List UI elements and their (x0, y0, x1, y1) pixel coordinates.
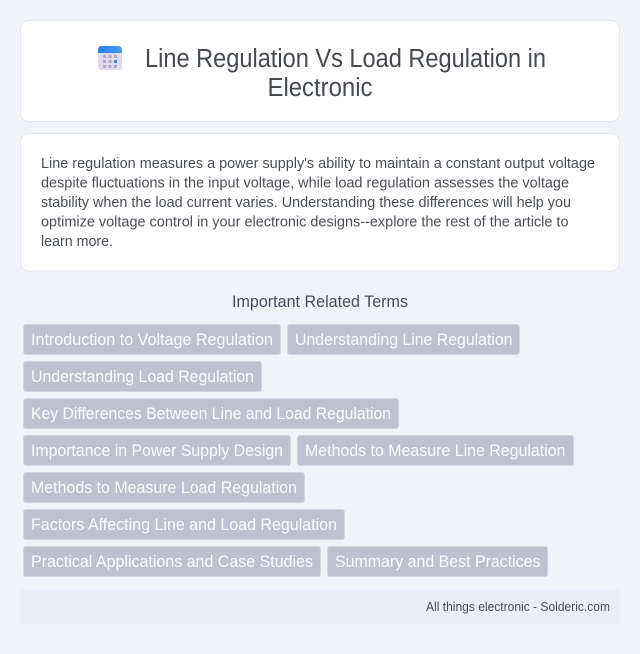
text block: introduction: stability when the load current varies. Understanding these differences will help you (41, 195, 571, 211)
panel: introduction card (20, 134, 620, 271)
text block: introduction: optimize voltage control in your electronic designs--explore the rest of the article to (41, 214, 568, 230)
tag: methods to measure line regulation (298, 436, 574, 466)
title (145, 45, 546, 102)
text block: introduction: Line regulation measures a power supply's ability to maintain a constant output voltage (41, 156, 595, 172)
tag: understanding line regulation: Understanding Line Regulation (295, 330, 512, 349)
tag: methods to measure line regulation: Methods to Measure Line Regulation (305, 441, 566, 460)
tag: practical applications (24, 546, 320, 576)
tag: methods to measure load regulation: Methods to Measure Load Regulation (31, 478, 297, 497)
tag: practical applications: Practical Applications and Case Studies (31, 552, 313, 571)
tag: factors affecting (24, 510, 344, 540)
tag: summary and best practices: Summary and Best Practices (335, 552, 540, 571)
tag: key differences (24, 398, 398, 428)
tag: understanding load regulation: Understanding Load Regulation (31, 367, 254, 386)
title: Electronic (268, 74, 373, 102)
tag: summary and best practices (328, 546, 548, 576)
tag: understanding load regulation (24, 362, 262, 392)
icon: calendar (98, 46, 122, 70)
footer: All things electronic - Solderic.com (426, 600, 610, 614)
title: Line Regulation Vs Load Regulation in (145, 45, 546, 73)
tag: introduction to voltage regulation (24, 324, 280, 354)
tag: methods to measure load regulation (24, 472, 304, 502)
heading: important related terms: Important Related Terms (232, 292, 408, 311)
tag: understanding line regulation (288, 324, 520, 354)
panel: header card (20, 20, 620, 122)
tag: factors affecting: Factors Affecting Line and Load Regulation (31, 515, 337, 534)
tag: importance in power supply design (24, 436, 290, 466)
tag: importance in power supply design: Importance in Power Supply Design (31, 441, 283, 460)
text block: introduction: despite fluctuations in the input voltage, while load regulation assesses the voltage (41, 176, 569, 192)
text block: introduction (41, 156, 595, 250)
text block: introduction: learn more. (41, 234, 113, 250)
tag: introduction to voltage regulation: Introduction to Voltage Regulation (31, 330, 273, 349)
footer (20, 590, 620, 624)
tag: key differences: Key Differences Between Line and Load Regulation (31, 404, 391, 423)
